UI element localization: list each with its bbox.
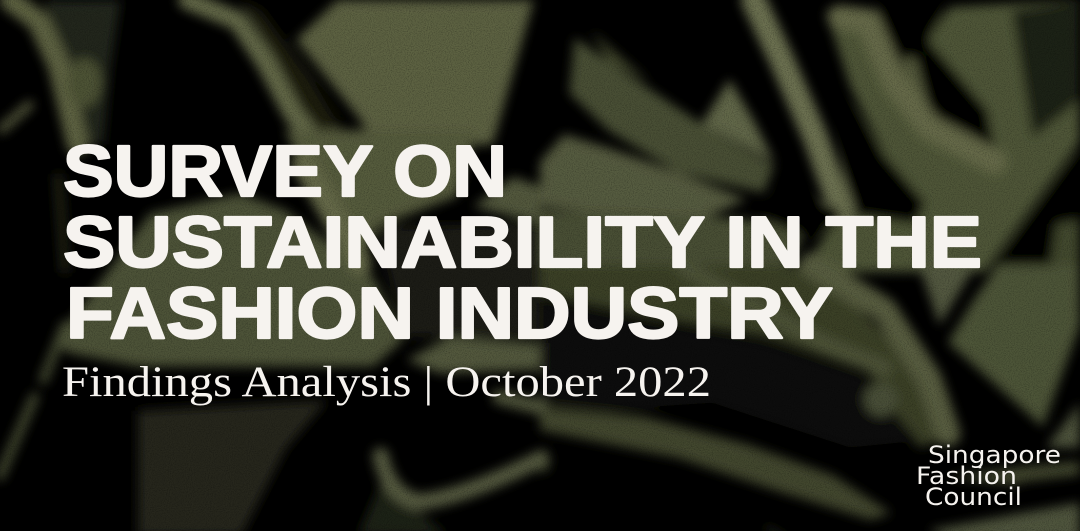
logo line 3: Council	[925, 483, 1022, 511]
title line 3: FASHION INDUSTRY	[66, 274, 833, 354]
logo: Singapore Fashion Council	[916, 441, 1061, 511]
title line 2: SUSTAINABILITY IN THE	[63, 203, 982, 283]
title line 1: SURVEY ON	[63, 132, 507, 212]
logo line 1: Singapore	[928, 441, 1061, 469]
title	[63, 132, 982, 354]
logo line 2: Fashion	[916, 462, 1017, 490]
subtitle: Findings Analysis | October 2022	[62, 359, 711, 406]
